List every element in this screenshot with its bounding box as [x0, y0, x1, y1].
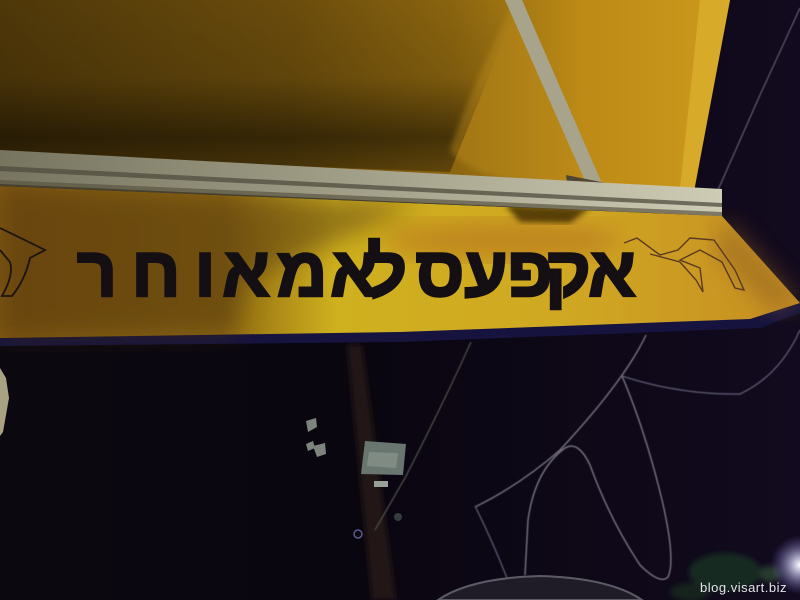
upper awning panel: [0, 0, 730, 192]
street light glow: [770, 535, 800, 595]
white object at left edge: [0, 368, 9, 436]
sign lettering: אקפעסלאמאוחר: [77, 233, 636, 311]
watermark: blog.visart.biz: [700, 580, 787, 595]
yellow banner: [0, 186, 800, 338]
tree foliage bottom right: [670, 553, 781, 600]
overhead wires: [375, 8, 800, 579]
bottom arc structure: [438, 576, 642, 600]
camel outline right: [624, 238, 744, 292]
utility pole: [347, 345, 396, 600]
navy banner edge: [0, 300, 800, 346]
floodlight on pole: [361, 441, 406, 487]
camel outline left: [0, 228, 45, 296]
metal strut: [505, 0, 606, 192]
metal rail: [0, 150, 722, 216]
small fixtures on pole: [306, 418, 402, 538]
